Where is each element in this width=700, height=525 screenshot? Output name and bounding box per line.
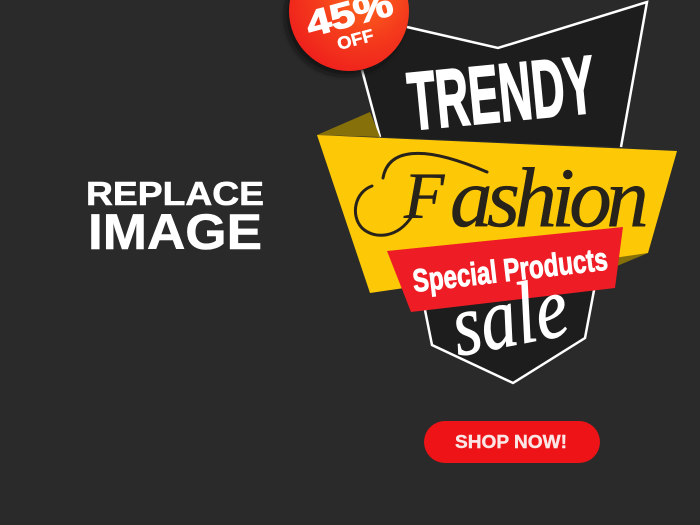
heading: replace image: IMAGE [88,204,262,260]
text: off: OFF [335,25,376,54]
yellow ribbon right fold [617,253,648,266]
upper black shield [362,2,647,147]
word: sale: sale [443,258,576,376]
button background [424,421,600,463]
F swash [355,153,487,235]
sale badge graphic [285,0,677,383]
button: shop now [424,421,600,463]
discount circle [285,0,409,76]
word: Fashion: F [403,160,445,233]
yellow ribbon left fold [317,112,380,137]
lower black shield [423,285,595,383]
button label: SHOP NOW! [455,432,567,452]
word: Fashion: ashion [450,151,645,245]
circle [289,0,409,71]
circle shadow [285,0,405,76]
shield white outline [362,70,380,137]
heading: replace image [86,175,264,260]
heading: replace image: REPLACE [86,175,264,212]
red label [387,227,623,312]
yellow ribbon [317,135,677,293]
text: special products: Special Products [411,241,610,299]
